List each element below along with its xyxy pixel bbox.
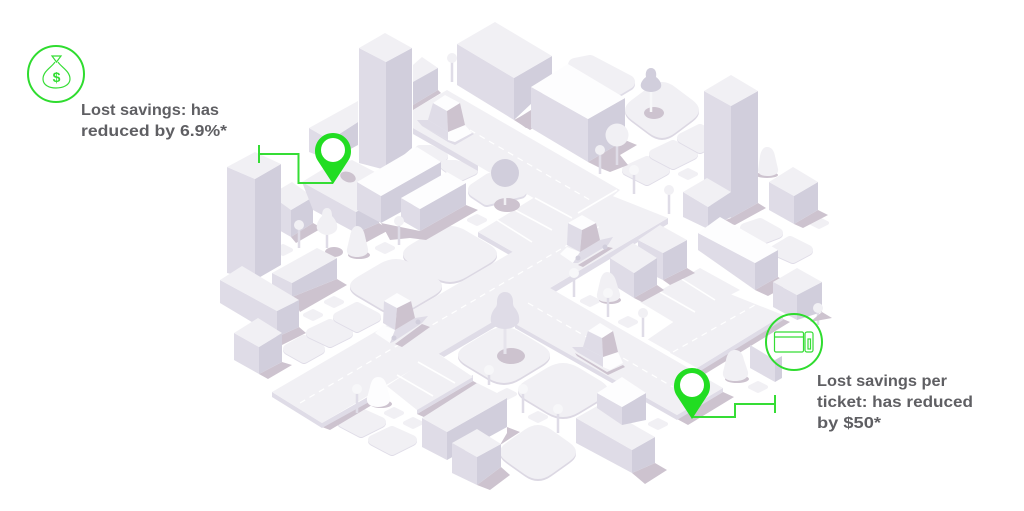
- building: east box: [769, 167, 828, 228]
- isometric city map: [220, 22, 832, 490]
- road network: [272, 90, 790, 430]
- building: central pair: [610, 225, 695, 302]
- car: northwest: [417, 95, 474, 145]
- tree and lamps: by big cube: [595, 124, 674, 214]
- building: far east box: [773, 268, 832, 325]
- lamps and trees: west: [294, 208, 404, 259]
- ground pads and tiles: [275, 62, 827, 479]
- icon: money bag badge: [28, 46, 84, 102]
- car: southwest: [375, 293, 430, 347]
- text: lost savings: reduced by 6.9%*: [81, 123, 228, 140]
- money bag outline: $: [53, 69, 61, 85]
- building: big white cube: [515, 64, 637, 172]
- tree: southeast egg: [723, 350, 749, 383]
- building: behind tower: [413, 57, 441, 110]
- connector: savings pin to label: [259, 145, 333, 183]
- icon: map pin savings: [315, 133, 351, 184]
- lamp: north: [447, 53, 457, 82]
- building: west long block: [220, 248, 347, 345]
- text: lost savings per ticket: Lost savings per: [817, 373, 947, 390]
- tower: east with annex: [683, 75, 766, 229]
- building: north box: [457, 22, 560, 130]
- connector: ticket pin to label: [692, 395, 775, 417]
- building: south small box: [452, 429, 510, 490]
- ticket outline: [774, 332, 813, 352]
- trees and lamps: south: [352, 268, 648, 433]
- building: east long block: [698, 217, 790, 296]
- tree: circular by road: [491, 159, 520, 212]
- icon: ticket badge: [766, 314, 822, 370]
- car: center: [560, 215, 613, 267]
- text: lost savings per ticket: by $50*: [817, 415, 882, 432]
- building: left back block: [309, 101, 358, 160]
- lane dashes and crossing stripes: [300, 130, 755, 403]
- tower: central: [359, 33, 412, 170]
- building: southeast small block: [750, 345, 782, 382]
- building: long white block and box: [302, 147, 478, 243]
- text: lost savings per ticket: ticket: has reduced: [817, 394, 973, 411]
- tree: on top-right pad: [641, 68, 664, 119]
- building: small box beside west tower: [270, 182, 322, 243]
- tower: west: [227, 152, 281, 280]
- text: lost savings: Lost savings: has: [81, 102, 219, 119]
- car: southeast: [572, 323, 625, 375]
- icon: map pin ticket: [674, 368, 710, 419]
- building: south central with small box: [576, 377, 667, 484]
- tree: behind east box: [756, 147, 778, 178]
- building: west small box: [234, 318, 292, 379]
- building: south west long block: [422, 383, 520, 460]
- tree: central large: [491, 292, 525, 364]
